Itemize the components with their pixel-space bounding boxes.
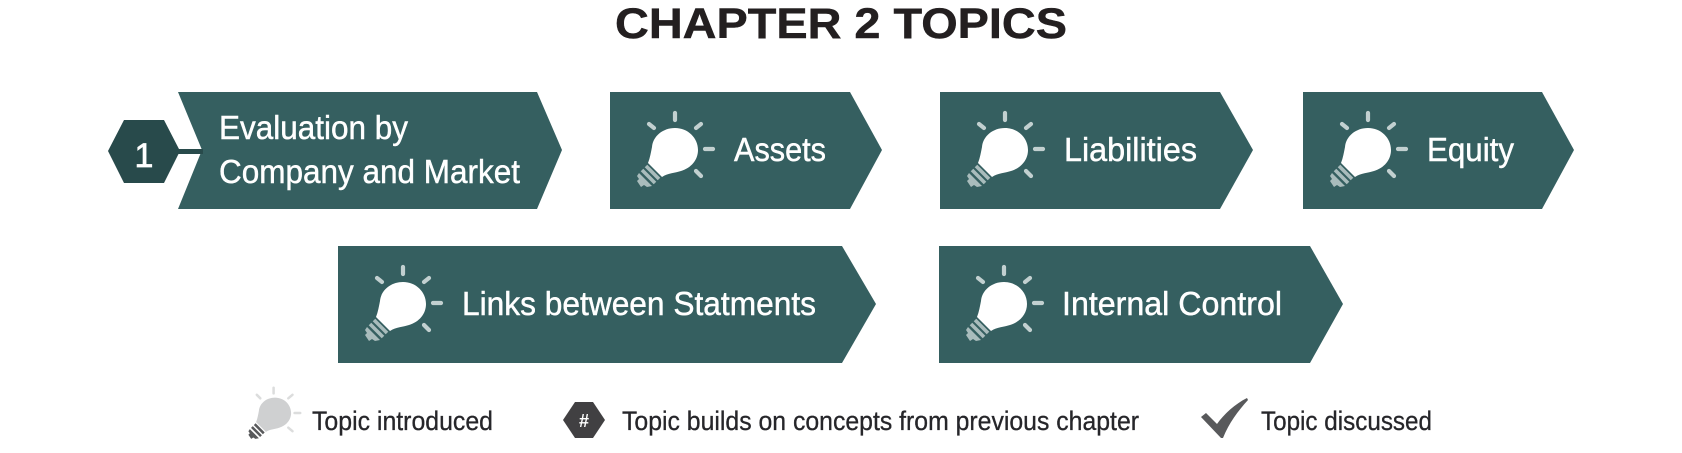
label: Internal Control: Internal Control: [1062, 285, 1282, 322]
legend: builds on concepts: [563, 402, 1139, 438]
icon: hexagon with hash: [563, 402, 605, 438]
label: Evaluation by: Evaluation by: [219, 109, 408, 146]
icon: light bulb: [637, 113, 713, 187]
panel: Evaluation by Company and Market: [108, 92, 562, 209]
icon: gray light bulb: [248, 388, 300, 439]
panel: Internal Control: [939, 246, 1343, 363]
icon: light bulb: [966, 267, 1042, 341]
label: Liabilities: Liabilities: [1064, 131, 1197, 168]
badge: chapter number 1: 1: [135, 137, 153, 175]
panel: Assets: [610, 92, 882, 209]
label: Company and Market: Company and Market: [219, 153, 520, 190]
legend: topic discussed: [1201, 398, 1432, 438]
connector line: [178, 149, 203, 154]
label: Links between Statments: Links between Statments: [462, 285, 816, 322]
icon: hexagon with hash: #: [579, 411, 589, 431]
icon: light bulb: [1330, 113, 1406, 187]
icon: light bulb: [967, 113, 1043, 187]
panel: Equity: [1303, 92, 1574, 209]
legend: topic introduced: [248, 388, 493, 439]
label: Topic builds on concepts from previous chapter: [622, 406, 1139, 436]
badge: chapter number 1: [108, 120, 180, 183]
icon: light bulb: [365, 267, 441, 341]
label: Equity: Equity: [1427, 131, 1514, 168]
label: Assets: Assets: [734, 131, 826, 168]
panel: Liabilities: [940, 92, 1253, 209]
label: Topic discussed: [1261, 406, 1432, 436]
label: Topic introduced: [312, 406, 493, 436]
title: CHAPTER 2 TOPICS: [615, 0, 1067, 48]
panel: Links between Statments: [338, 246, 876, 363]
icon: check mark: [1201, 398, 1248, 438]
